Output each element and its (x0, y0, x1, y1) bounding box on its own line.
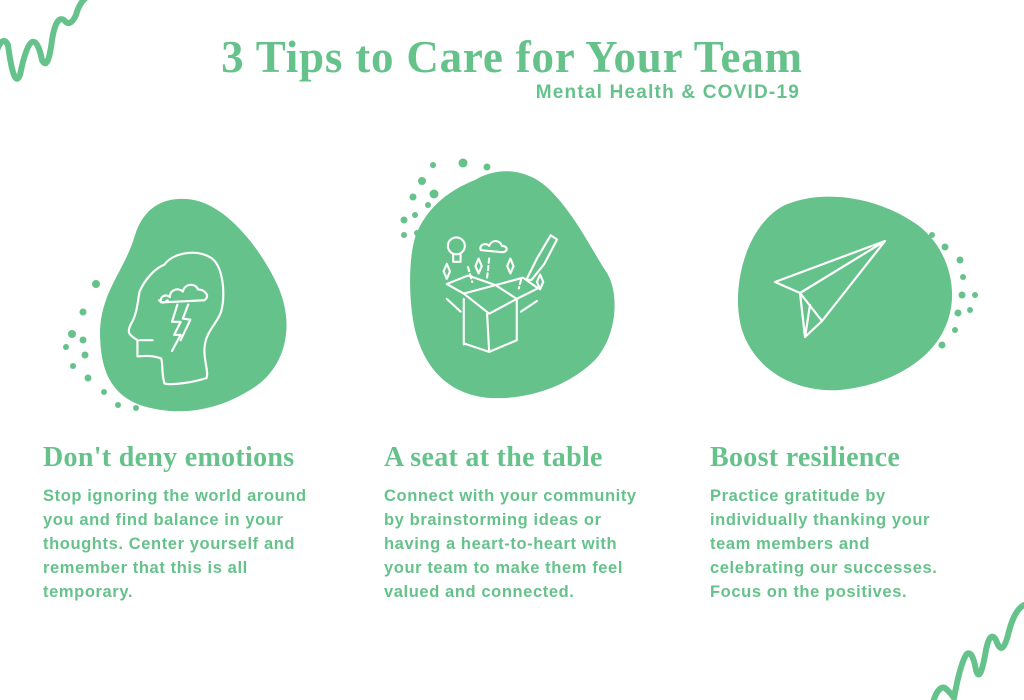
text 1: Stop ignoring the world around you and find balance in your thoughts. Center yourself and remember that this is all temporary. (43, 487, 307, 601)
icon: paper plane blob (738, 196, 978, 390)
decorative squiggle top left (0, 0, 88, 82)
text 2: Connect with your community by brainstorming ideas or having a heart-to-heart with your team to make them feel valued and connected. (384, 487, 637, 601)
icon: head blob (63, 198, 286, 412)
decorative squiggle bottom right (930, 602, 1024, 700)
heading 3: Boost resilience (710, 442, 900, 473)
heading 1: Don't deny emotions (43, 442, 294, 473)
icon: box blob (400, 158, 615, 398)
heading 2: A seat at the table (384, 442, 603, 473)
text 3: Practice gratitude by individually thanking your team members and celebrating our successes. Focus on the positives. (710, 487, 937, 601)
title: 3 Tips to Care for Your Team (221, 32, 803, 82)
subtitle: Mental Health & COVID-19 (536, 82, 800, 103)
